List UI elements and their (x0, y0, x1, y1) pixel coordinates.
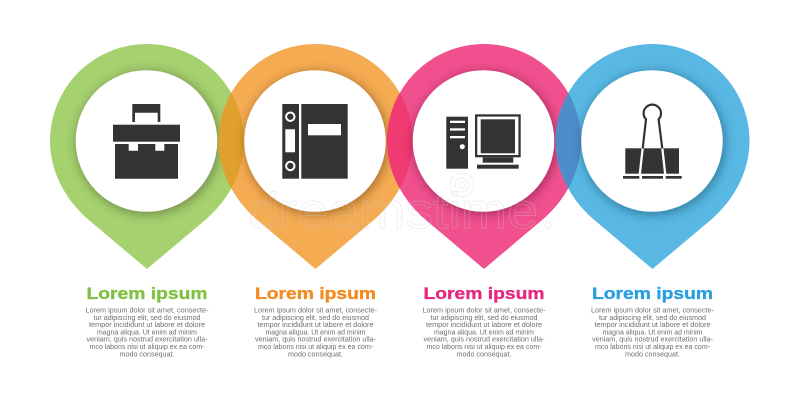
text block: column 4: tempor incididunt ut labore et dolore (594, 322, 711, 329)
text block: column 3: Lorem ipsum dolor sit amet, consecte- (422, 308, 546, 314)
text block: column 1: tur adipiscing elit, sed do eiusmod (94, 315, 201, 322)
text block: column 3: Lorem ipsum (424, 284, 544, 303)
text block: column 2: modo consequat. (288, 351, 343, 358)
text block: column 2: Lorem ipsum (255, 284, 376, 303)
text block: column 2: tur adipiscing elit, sed do eiusmod (262, 315, 369, 322)
panel: blue pin (556, 44, 750, 269)
panel: orange pin (218, 44, 412, 269)
text block: column 3: tur adipiscing elit, sed do eiusmod (430, 315, 538, 322)
text block: column 1: magna aliqua. Ut enim ad minim (97, 329, 197, 336)
text block: column 4 (591, 284, 715, 358)
text block: column 2: mco laboris nisi ut aliquip ex ea com- (258, 344, 374, 351)
text block: column 2: tempor incididunt ut labore et dolore (258, 322, 374, 329)
panel: pink pin (387, 44, 581, 269)
text block: column 3: veniam, quis nostrud exercitation ulla- (424, 337, 545, 344)
text block: column 2: magna aliqua. Ut enim ad minim (266, 329, 366, 336)
text block: column 1: mco laboris nisi ut aliquip ex ea com- (90, 344, 205, 351)
icon: binder (282, 104, 348, 179)
text block: column 3 (422, 284, 546, 358)
text block: column 4: mco laboris nisi ut aliquip ex ea com- (595, 344, 711, 351)
icon: desktop computer (446, 114, 521, 169)
text block: column 4: Lorem ipsum dolor sit amet, consecte- (591, 308, 715, 314)
text block: column 2: Lorem ipsum dolor sit amet, consecte- (254, 308, 378, 314)
text block: column 4: Lorem ipsum (592, 284, 713, 303)
text block: column 1: modo consequat. (120, 351, 175, 358)
icon: briefcase (113, 104, 180, 179)
text block: column 3: modo consequat. (456, 351, 512, 358)
icon: binder clip (623, 105, 682, 179)
text block: column 4: veniam, quis nostrud exercitation ulla- (592, 337, 714, 344)
text block: column 1: veniam, quis nostrud exercitation ulla- (86, 337, 208, 344)
watermark: dreamstime (248, 183, 538, 239)
text block: column 4: magna aliqua. Ut enim ad minim (602, 329, 703, 336)
text block: column 4: tur adipiscing elit, sed do eiusmod (599, 315, 706, 322)
text block: column 4: modo consequat. (625, 351, 680, 358)
text block: column 3: mco laboris nisi ut aliquip ex ea com- (426, 344, 542, 351)
text block: column 3: magna aliqua. Ut enim ad minim (434, 329, 534, 336)
text block: column 1 (86, 284, 209, 358)
text block: column 1: Lorem ipsum (86, 284, 208, 303)
text block: column 2 (254, 284, 378, 358)
text block: column 3: tempor incididunt ut labore et dolore (426, 322, 542, 329)
panel: green pin (50, 44, 244, 269)
text block: column 1: Lorem ipsum dolor sit amet, consecte- (86, 308, 209, 314)
text block: column 2: veniam, quis nostrud exercitation ulla- (255, 337, 377, 344)
text block: column 1: tempor incididunt ut labore et dolore (89, 322, 205, 329)
